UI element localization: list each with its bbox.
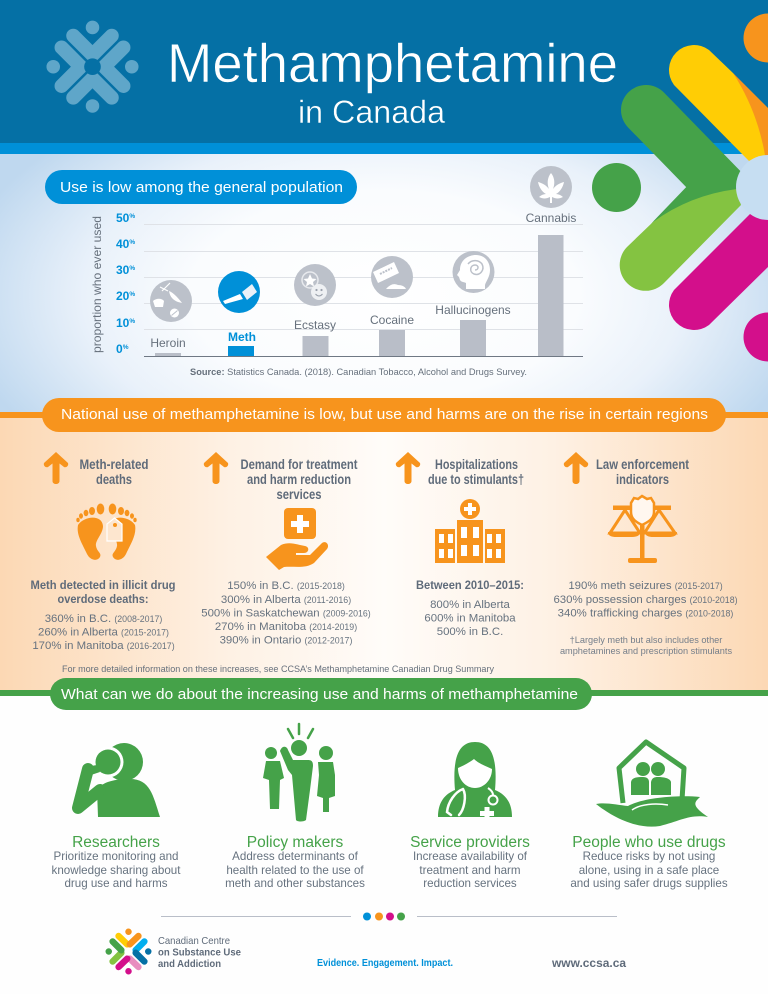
description: and using safer drugs supplies bbox=[570, 877, 728, 890]
footnote: †Largely meth but also includes other bbox=[570, 635, 722, 645]
description: Address determinants of bbox=[232, 850, 359, 863]
heading: due to stimulants† bbox=[428, 471, 524, 487]
icon: ecstasy bbox=[294, 264, 336, 306]
panel: service providers bbox=[410, 742, 530, 890]
text block: 390% in Ontario (2012-2017) bbox=[220, 634, 352, 646]
description bbox=[570, 850, 728, 890]
panel: hospitalizations bbox=[396, 452, 524, 638]
text block: 600% in Manitoba bbox=[424, 612, 516, 624]
bar labels: Cannabis bbox=[526, 211, 576, 225]
text block bbox=[30, 578, 176, 652]
icon: researcher with magnifier bbox=[78, 743, 160, 817]
icon: cocaine bbox=[371, 256, 413, 298]
footnote: amphetamines and prescription stimulants bbox=[560, 646, 732, 656]
y axis labels: % bbox=[123, 344, 129, 351]
heading: and harm reduction bbox=[247, 471, 351, 487]
y axis labels: 30 bbox=[116, 263, 129, 277]
panel background: use among population bbox=[0, 154, 768, 412]
text block: Meth detected in illicit drug bbox=[30, 578, 176, 592]
bar labels: Meth bbox=[228, 330, 256, 344]
panel: demand for treatment bbox=[201, 452, 371, 646]
footer divider bbox=[161, 912, 617, 920]
y axis labels: 20 bbox=[116, 289, 129, 303]
panel: policy makers bbox=[225, 724, 365, 890]
bar labels bbox=[150, 211, 576, 350]
section heading: what can we do bbox=[50, 678, 592, 710]
text block: 150% in B.C. (2015-2018) bbox=[227, 580, 345, 592]
description: Reduce risks by not using bbox=[583, 850, 715, 863]
heading bbox=[596, 456, 689, 487]
section heading: use is low bbox=[45, 170, 357, 204]
footnote bbox=[560, 635, 732, 656]
icon: up arrow bbox=[564, 452, 588, 484]
section heading: use is low: Use is low among the general population bbox=[60, 179, 343, 196]
description: alone, using in a safe place bbox=[579, 864, 719, 877]
text block: 500% in Saskatchewan (2009-2016) bbox=[201, 608, 371, 620]
heading: Meth-related bbox=[80, 456, 148, 472]
text block: Between 2010–2015: bbox=[416, 578, 524, 592]
text block bbox=[553, 580, 738, 620]
text block: overdose deaths: bbox=[58, 592, 148, 606]
description: Increase availability of bbox=[413, 850, 528, 863]
section heading: what can we do: What can we do about the increasing use and harms of methamphetamine bbox=[61, 686, 578, 703]
text block: 270% in Manitoba (2014-2019) bbox=[215, 621, 357, 633]
organization name: on Substance Use bbox=[158, 946, 241, 958]
text block: 800% in Alberta bbox=[430, 599, 511, 611]
y axis labels: % bbox=[129, 291, 135, 298]
description: knowledge sharing about bbox=[52, 864, 181, 877]
y axis labels: 50 bbox=[116, 211, 129, 225]
text block bbox=[201, 580, 371, 646]
icon: hospital bbox=[435, 499, 505, 563]
organization name: and Addiction bbox=[158, 958, 221, 970]
header band bbox=[0, 0, 768, 154]
more information note: For more detailed information on these increases, see CCSA’s Methamphetamine Canadian Drug Summary bbox=[62, 664, 494, 675]
description: reduction services bbox=[423, 877, 517, 890]
icon: footer logo bbox=[105, 928, 152, 975]
heading: services bbox=[276, 486, 322, 502]
text block bbox=[416, 578, 524, 638]
icon: up arrow bbox=[204, 452, 228, 484]
icon: up arrow bbox=[396, 452, 420, 484]
heading: indicators bbox=[616, 471, 669, 487]
y axis labels: % bbox=[129, 318, 135, 325]
divider band: green bbox=[0, 690, 768, 696]
description: drug use and harms bbox=[64, 877, 168, 890]
section heading: national use: National use of methamphetamine is low, but use and harms are on the rise in certain regions bbox=[61, 406, 708, 423]
text block: 500% in B.C. bbox=[437, 626, 503, 638]
label: Policy makers bbox=[247, 834, 343, 851]
y axis labels: % bbox=[129, 239, 135, 246]
heading: deaths bbox=[96, 471, 132, 487]
panel: researchers bbox=[52, 743, 181, 890]
description: Prioritize monitoring and bbox=[53, 850, 179, 863]
panel: law enforcement bbox=[553, 452, 738, 656]
heading: Law enforcement bbox=[596, 456, 689, 472]
tagline: Evidence. Engagement. Impact. bbox=[317, 958, 453, 969]
title: Methamphetamine bbox=[167, 33, 618, 94]
icon: heroin bbox=[150, 280, 192, 322]
icon: up arrow bbox=[44, 452, 68, 484]
description: health related to the use of bbox=[226, 864, 364, 877]
description bbox=[225, 850, 365, 890]
bar labels: Hallucinogens bbox=[435, 303, 511, 317]
text block: 340% trafficking charges (2010-2018) bbox=[558, 608, 733, 620]
heading: Demand for treatment bbox=[240, 456, 358, 472]
heading bbox=[80, 456, 148, 487]
label: Service providers bbox=[410, 834, 530, 851]
icon: people in house on hand bbox=[596, 742, 708, 827]
text block: 630% possession charges (2010-2018) bbox=[553, 594, 738, 606]
icon: cannabis bbox=[530, 166, 572, 208]
text block: 300% in Alberta (2011-2016) bbox=[221, 594, 351, 606]
label: People who use drugs bbox=[572, 834, 726, 851]
label: Researchers bbox=[72, 834, 160, 851]
y axis labels bbox=[116, 211, 135, 356]
bar labels: Ecstasy bbox=[294, 318, 336, 332]
icon: large colour logo bbox=[592, 14, 768, 362]
icon: hallucinogens bbox=[452, 251, 494, 293]
text block: 170% in Manitoba (2016-2017) bbox=[32, 640, 175, 652]
icon: meth bbox=[218, 271, 260, 313]
bar labels: Cocaine bbox=[370, 313, 414, 327]
text block: 260% in Alberta (2015-2017) bbox=[38, 626, 169, 638]
section heading: national use bbox=[42, 398, 726, 432]
icon: scales with police badge bbox=[608, 496, 677, 563]
icon: feet with toe tag bbox=[76, 504, 137, 560]
description bbox=[52, 850, 181, 890]
heading bbox=[428, 456, 524, 487]
panel: people who use drugs bbox=[570, 742, 728, 890]
heading: Hospitalizations bbox=[435, 456, 518, 472]
y axis labels: 40 bbox=[116, 237, 129, 251]
title: in Canada bbox=[298, 94, 445, 130]
description bbox=[413, 850, 528, 890]
description: treatment and harm bbox=[419, 864, 521, 877]
divider band: orange bbox=[0, 412, 768, 418]
icon: header logo bbox=[46, 21, 139, 113]
bar chart: proportion who ever used bbox=[90, 166, 583, 356]
text block: 360% in B.C. (2008-2017) bbox=[45, 613, 162, 625]
website: www.ccsa.ca bbox=[551, 958, 627, 970]
icon: group of people bbox=[263, 724, 335, 822]
text block: 190% meth seizures (2015-2017) bbox=[568, 580, 723, 592]
organization name bbox=[158, 935, 241, 970]
source note: Source: Statistics Canada. (2018). Canadian Tobacco, Alcohol and Drugs Survey. bbox=[190, 367, 527, 378]
y axis labels: 10 bbox=[116, 316, 129, 330]
description: meth and other substances bbox=[225, 877, 365, 890]
y axis labels: % bbox=[129, 213, 135, 220]
bar labels: Heroin bbox=[150, 336, 186, 350]
organization name: Canadian Centre bbox=[158, 935, 230, 947]
bars bbox=[155, 235, 564, 356]
icon: healthcare worker bbox=[438, 742, 512, 820]
icon: hand holding medical cross bbox=[266, 508, 328, 570]
title bbox=[167, 33, 618, 130]
heading bbox=[240, 456, 358, 502]
y axis labels: % bbox=[129, 265, 135, 272]
panel background: national use bbox=[0, 418, 768, 690]
panel: meth-related deaths bbox=[30, 452, 176, 652]
y axis title: proportion who ever used bbox=[90, 216, 104, 353]
y axis labels: 0 bbox=[116, 342, 123, 356]
